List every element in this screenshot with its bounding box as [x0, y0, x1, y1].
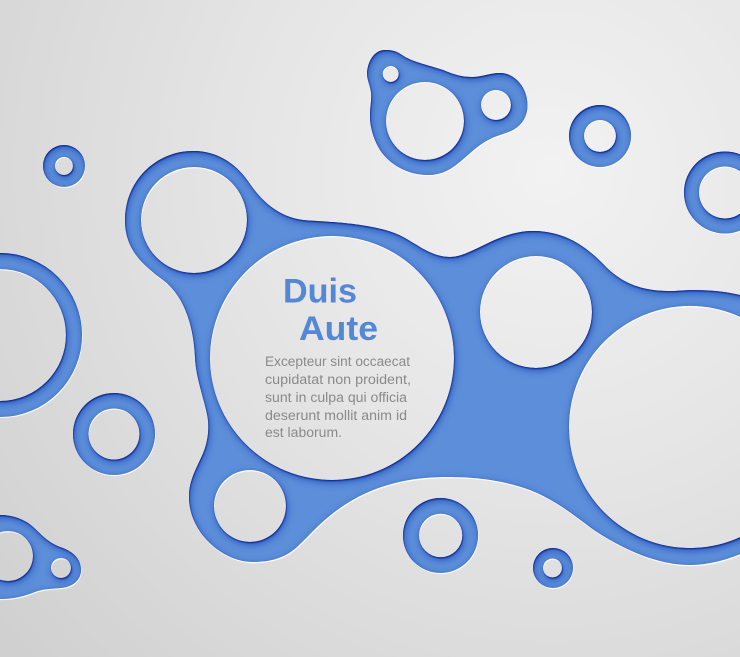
blob: top with three holes: [367, 50, 528, 176]
body text: Excepteur sint occaecat: [265, 354, 410, 369]
ring: small bottom: [533, 548, 574, 589]
body text: deserunt mollit anim id: [265, 408, 407, 423]
ring: large left edge: [0, 253, 83, 418]
ring: lower left: [73, 393, 156, 476]
blob: bottom left with two holes: [0, 515, 82, 600]
ring: bottom middle: [403, 498, 479, 574]
ring: small upper left: [43, 145, 86, 188]
ring: upper middle right: [569, 105, 632, 168]
body text: [265, 354, 411, 440]
heading: [283, 272, 378, 348]
body text: sunt in culpa qui officia: [265, 390, 408, 405]
blob: main central shape with five circular cutouts: [125, 151, 740, 566]
heading: Duis: [283, 272, 357, 310]
heading: Aute: [299, 310, 378, 348]
body text: cupidatat non proident,: [265, 372, 411, 387]
ring: right edge: [684, 152, 740, 235]
body text: est laborum.: [265, 425, 342, 440]
